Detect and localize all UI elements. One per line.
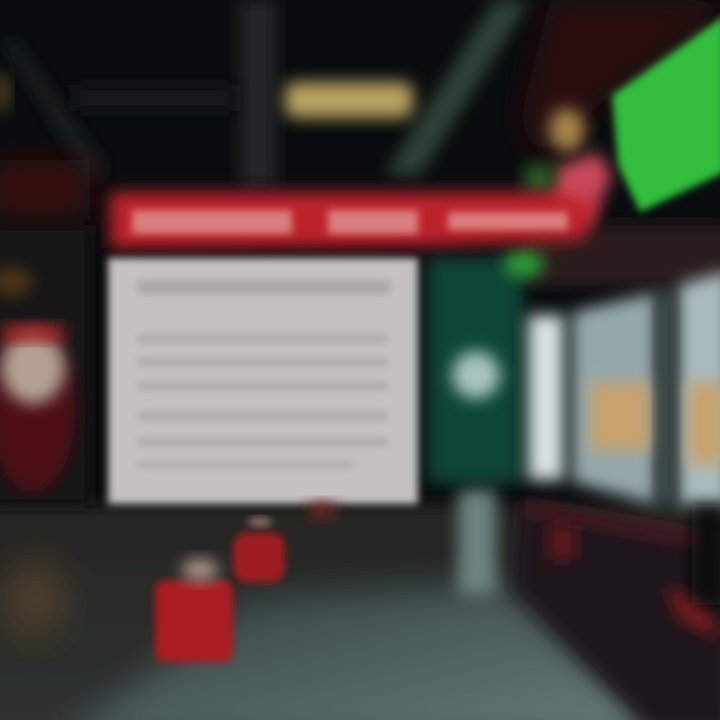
red banner: [110, 192, 598, 248]
green screen: [612, 15, 720, 212]
standing figure: [458, 490, 496, 595]
left round red sign: [0, 268, 75, 492]
right dark band: [530, 225, 720, 285]
red cylinder back: [233, 517, 285, 582]
white sign on green wall: [452, 351, 500, 399]
ceiling beams: [0, 0, 530, 185]
banner text blur: [132, 210, 568, 234]
dark red upper right wall: [520, 0, 720, 160]
green wall column: [428, 258, 523, 483]
counter: [515, 500, 720, 720]
left wall shelves: [0, 225, 90, 505]
floor: [0, 505, 720, 720]
figure above banner: [525, 108, 612, 225]
windows: [528, 270, 720, 510]
red cylinder front: [155, 559, 233, 662]
green accent under banner: [504, 249, 544, 279]
dark red left wall: [0, 160, 90, 220]
panel text blur: [138, 280, 390, 468]
notice panel: [108, 258, 418, 504]
ceiling light: [285, 82, 413, 118]
small red marker: [308, 502, 336, 518]
